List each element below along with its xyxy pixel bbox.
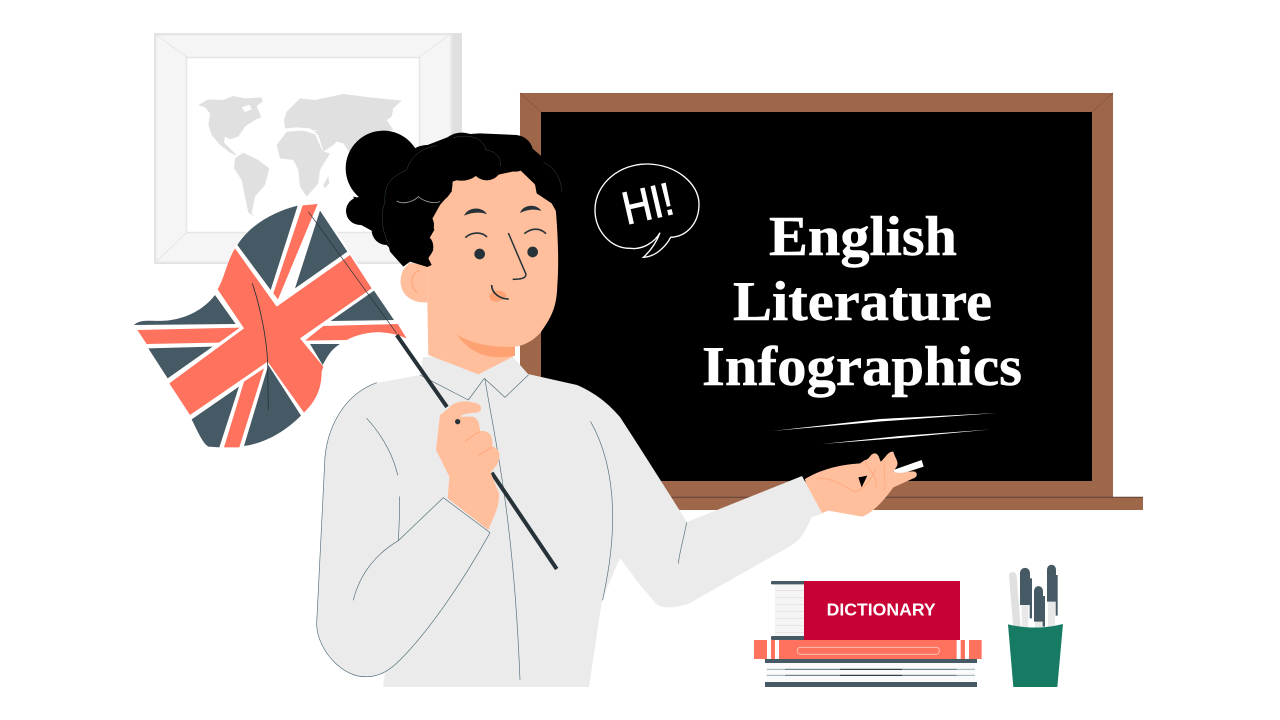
- chalk underlines: [772, 413, 997, 444]
- title: Infographics: [702, 336, 1022, 398]
- orange book: [754, 640, 982, 659]
- face and neck: [427, 162, 558, 374]
- world map: [198, 94, 402, 217]
- cheek and smile: [489, 291, 507, 302]
- cup: [1008, 624, 1063, 687]
- ear: [401, 263, 427, 302]
- shirt: [317, 357, 822, 687]
- pencil: [1009, 572, 1021, 628]
- pen one: [1020, 568, 1032, 628]
- head: [346, 131, 567, 374]
- wall map in frame: [154, 33, 462, 264]
- flag pole: [397, 335, 557, 569]
- chalkboard: [520, 93, 1143, 510]
- holding hand: [436, 401, 500, 530]
- board frame and ledge: [520, 93, 1143, 510]
- title: Literature: [733, 271, 992, 333]
- hair: [346, 131, 567, 267]
- eyes: [474, 249, 485, 259]
- title: [702, 206, 1022, 398]
- British flag: [134, 203, 407, 447]
- teacher: [317, 131, 924, 687]
- pointing hand with chalk: [805, 452, 924, 517]
- neck shadow: [457, 334, 515, 357]
- dictionary book: DICTIONARY: [827, 600, 936, 620]
- title: English: [769, 206, 957, 268]
- nose: [508, 233, 526, 279]
- speech bubble: HI!: [595, 164, 699, 257]
- pen two: [1034, 586, 1045, 629]
- dictionary book: [771, 581, 960, 640]
- speech bubble: HI!: HI!: [617, 172, 678, 234]
- eyebrows: [464, 206, 541, 216]
- bottom book: [765, 659, 977, 687]
- pen cup: [1008, 565, 1063, 687]
- pen three: [1047, 565, 1058, 628]
- shirt seams: [317, 375, 613, 680]
- stack of books: [754, 581, 982, 687]
